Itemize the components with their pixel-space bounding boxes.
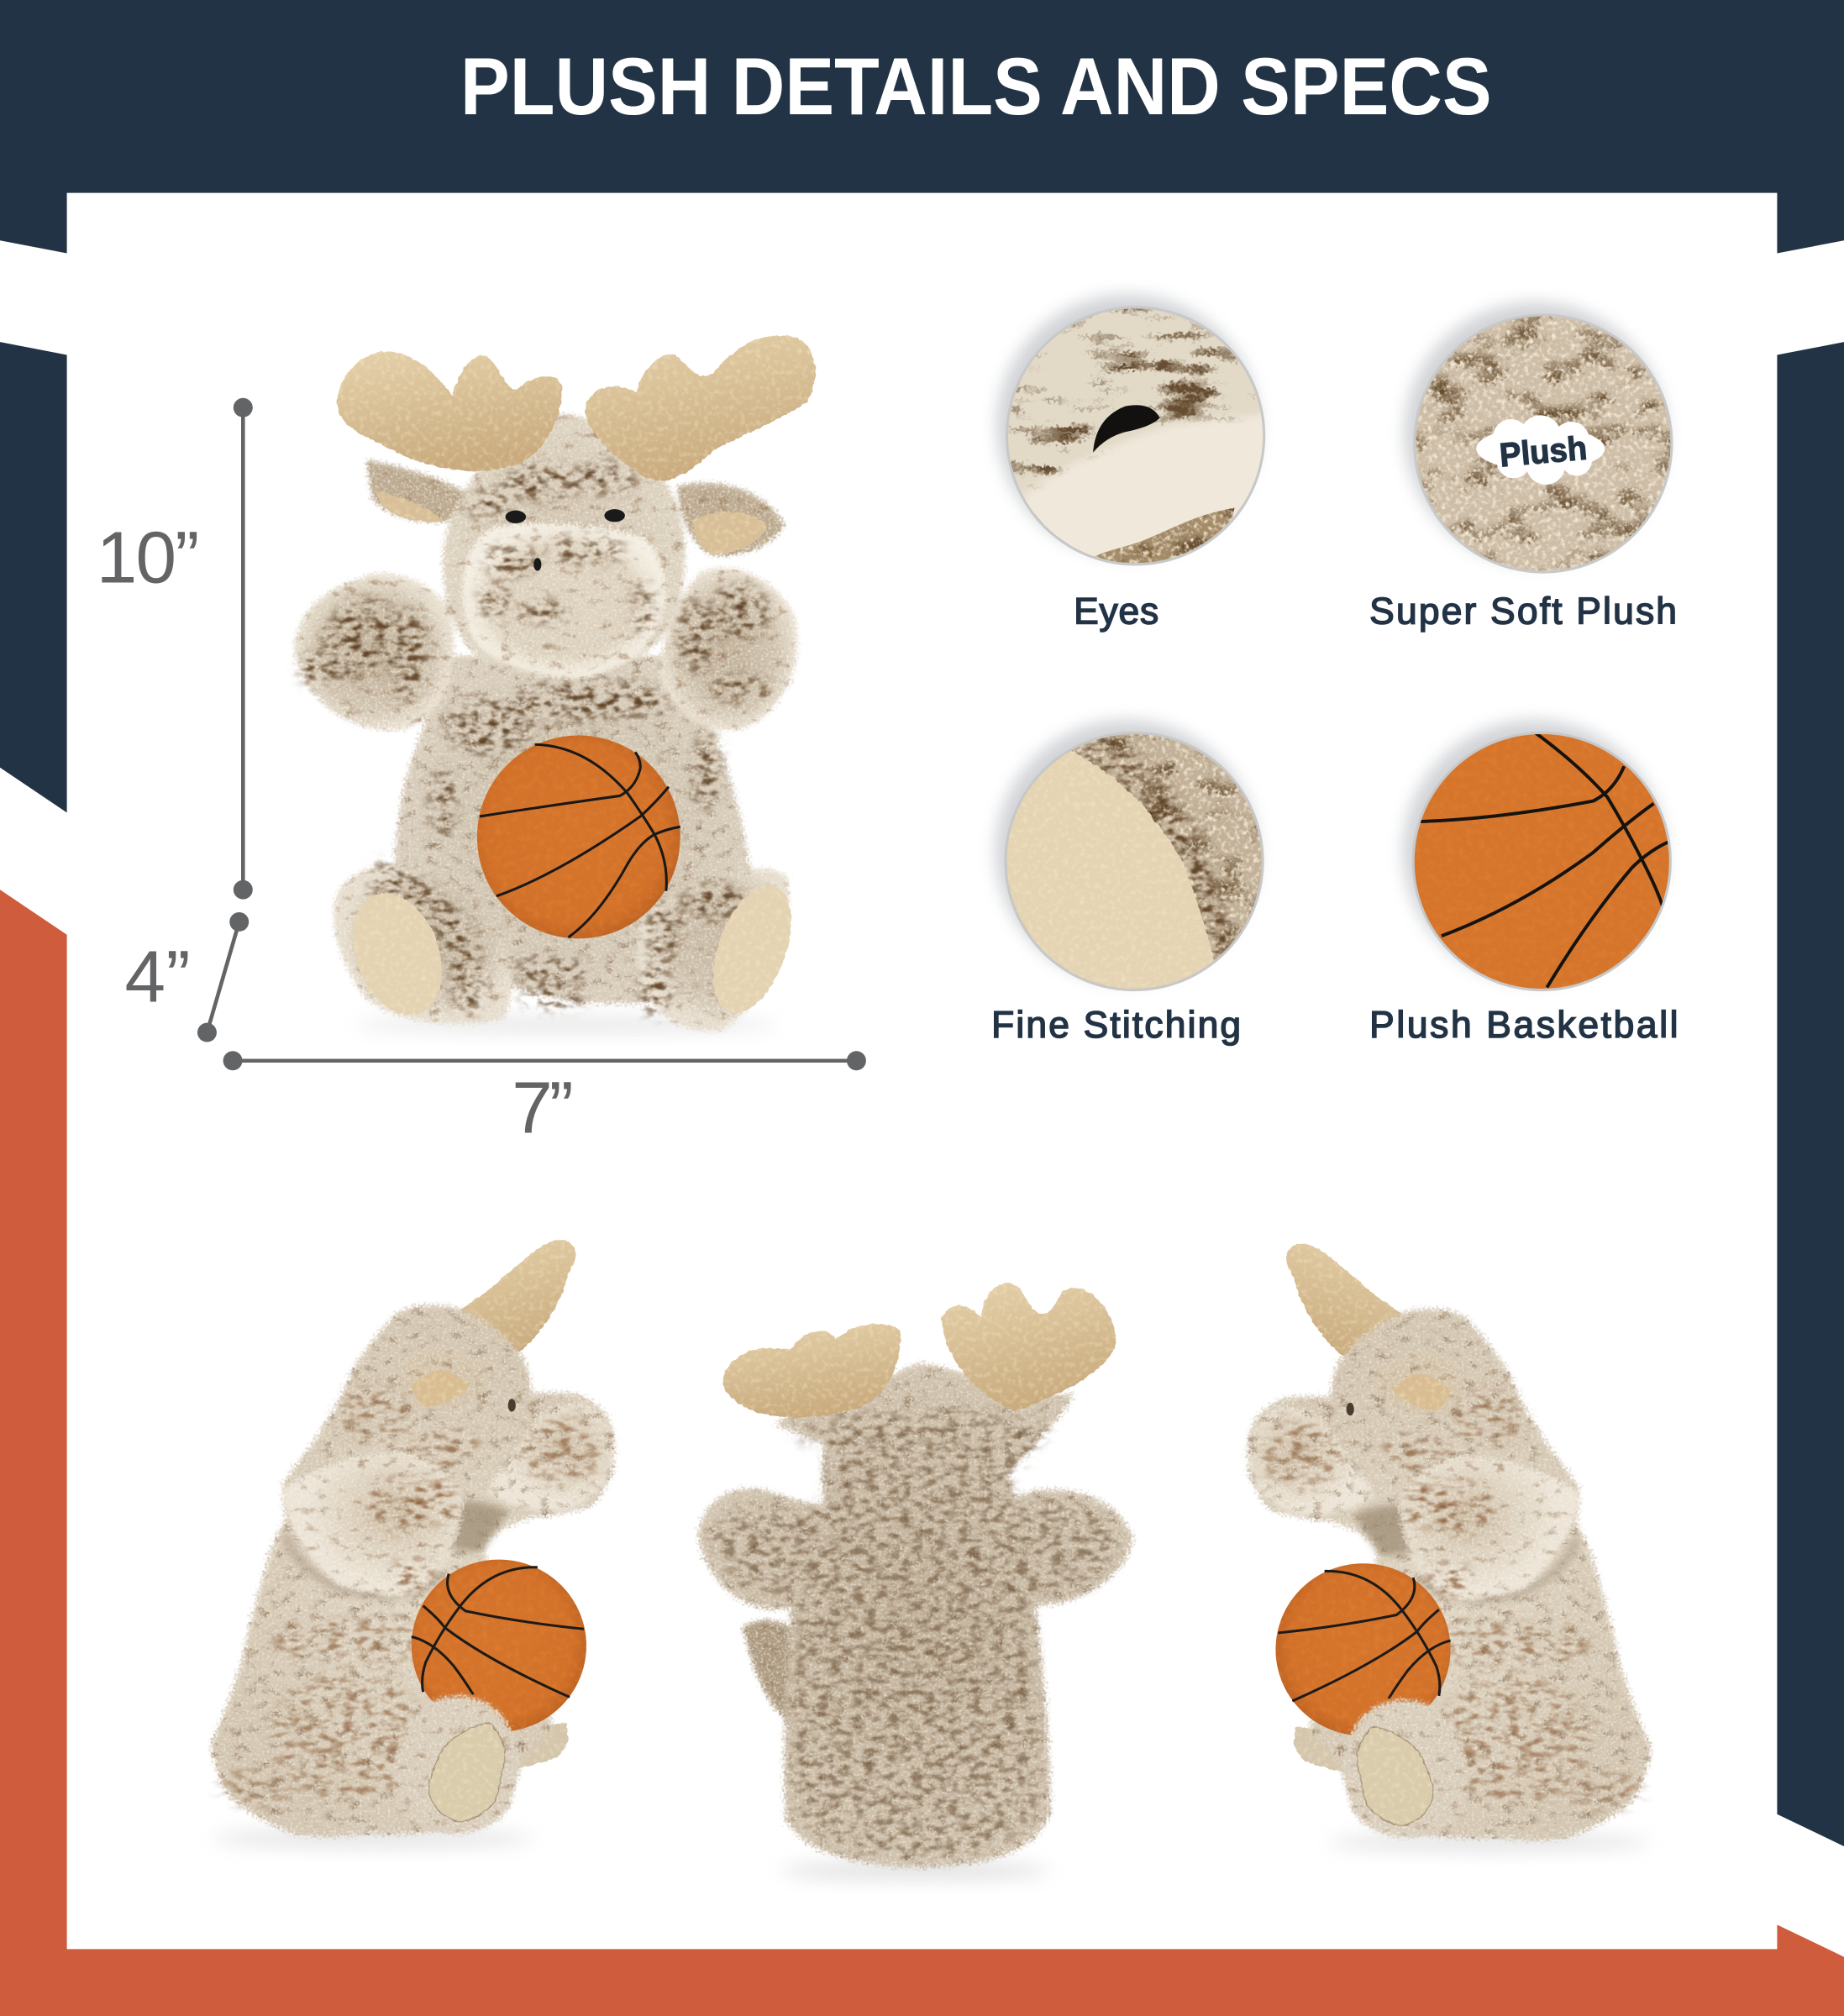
label: fine stitching: Fine Stitching [991,1005,1241,1046]
rear view antlers [722,1283,1116,1417]
left side view plush moose [211,1240,615,1847]
detail circle: fine stitching [990,720,1268,1016]
moose head and muzzle brown fur patches [465,463,654,633]
label: super soft plush: Super Soft Plush [1369,591,1677,632]
plush basketball [477,736,680,938]
plush cloud badge: Plush [1498,430,1589,474]
rear view shadow [780,1861,1051,1880]
moose antlers [337,335,816,480]
orange left and bottom frame [0,890,1844,2016]
dimension label 4 inches: 4” [124,936,191,1017]
floor shadow [354,1017,778,1032]
detail circle: eyes [996,295,1273,572]
dimension label 7 inches: 7” [512,1067,574,1148]
dimension: depth line [197,912,249,1042]
moose arms [294,568,797,730]
plush cloud badge [1476,415,1605,485]
front view plush moose [294,335,816,1032]
detail circle: plush basketball [1403,720,1679,996]
title: PLUSH DETAILS AND SPECS [460,42,1492,132]
moose ears [366,460,785,555]
dimension: height line [234,398,253,900]
label: plush basketball: Plush Basketball [1369,1005,1679,1046]
moose foot pads [337,874,806,1027]
dimension label 10 inches: 10” [97,517,199,598]
detail circle: super soft plush [1405,302,1679,579]
moose chest and belly brown fur patches [431,680,720,1008]
dimension: width line [223,1051,866,1070]
moose arm brown fur patches [298,584,770,702]
moose inner ears [376,491,768,554]
moose head [443,413,686,675]
moose legs [334,864,789,1031]
moose leg brown fur patches [373,877,747,1016]
navy top band with side tabs [0,0,1844,254]
navy right side bar [1777,342,1844,1846]
moose muzzle [463,523,666,679]
right side view plush moose [1248,1244,1651,1851]
label: eyes: Eyes [1074,591,1158,632]
moose body fur [395,656,750,1004]
rear view brown fur streaks [710,1410,1119,1858]
rear view foot [743,1620,795,1723]
rear view plush moose [698,1283,1133,1880]
rear view body fur [698,1362,1133,1866]
navy left side bar [0,342,67,812]
moose eyes and nostrils [506,509,625,571]
